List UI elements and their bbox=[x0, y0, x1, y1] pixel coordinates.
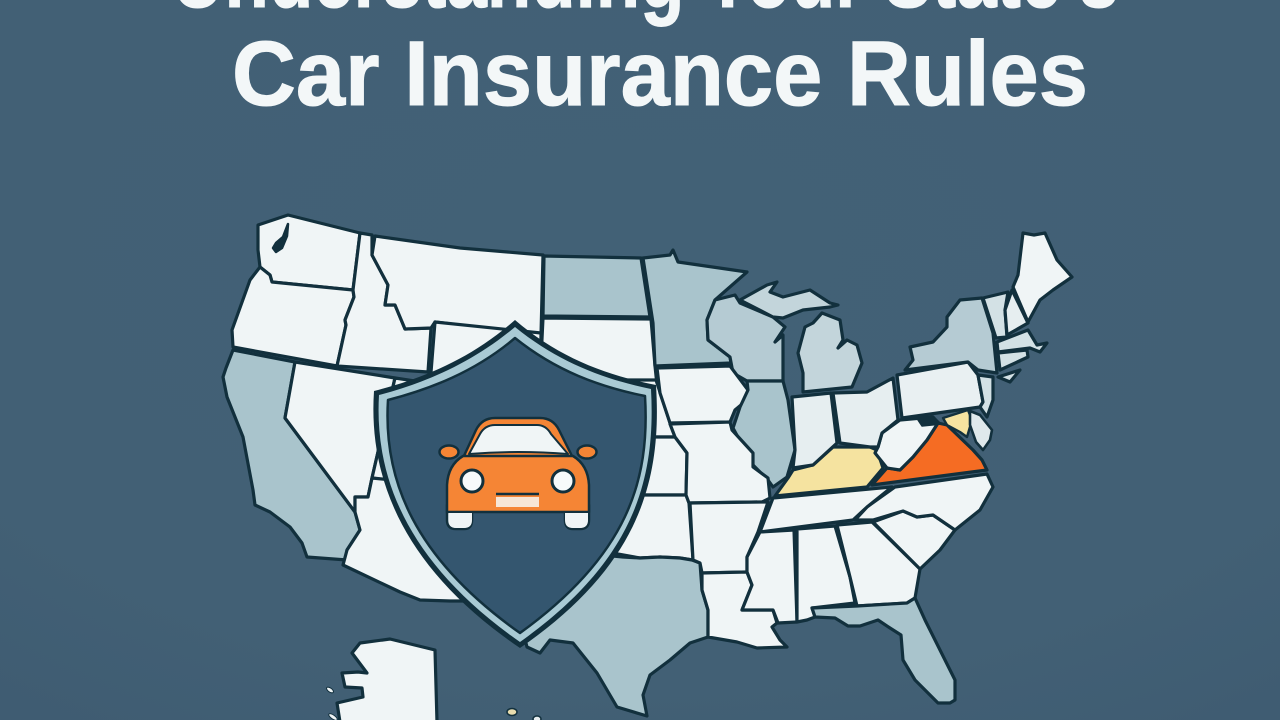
dark Potomac patch bbox=[918, 417, 941, 426]
car body bbox=[447, 456, 589, 512]
state: Wyoming bbox=[428, 322, 541, 420]
state: West Virginia bbox=[875, 417, 938, 470]
state: Idaho bbox=[337, 233, 431, 372]
state: Alabama bbox=[797, 526, 855, 622]
state: Washington bbox=[258, 215, 360, 290]
state: Nebraska bbox=[540, 380, 675, 437]
car windshield bbox=[469, 425, 568, 454]
state: Oregon bbox=[232, 267, 354, 366]
state: Oklahoma bbox=[540, 495, 693, 560]
state: North Carolina bbox=[855, 474, 993, 530]
state: Minnesota bbox=[643, 250, 747, 366]
state: Connecticut and Rhode Island bbox=[998, 350, 1028, 370]
state: Florida bbox=[812, 598, 955, 703]
state: Arkansas bbox=[690, 502, 768, 573]
icon: car bbox=[440, 418, 596, 529]
car plate bbox=[496, 494, 539, 507]
shield bbox=[373, 320, 657, 648]
state: Maryland bbox=[943, 410, 972, 437]
state: Massachusetts bbox=[997, 330, 1047, 352]
state: Montana bbox=[372, 236, 543, 335]
state: Tennessee bbox=[760, 487, 892, 532]
state: Virginia bbox=[872, 423, 987, 485]
state: Georgia bbox=[837, 522, 920, 606]
state: Arizona and New Mexico bbox=[343, 478, 540, 601]
state: Louisiana bbox=[702, 572, 787, 648]
state: Illinois bbox=[733, 381, 795, 487]
state: New York bbox=[905, 298, 997, 373]
state: New Jersey bbox=[978, 375, 993, 417]
state: South Carolina bbox=[873, 511, 955, 569]
state: Kentucky bbox=[775, 447, 883, 496]
Puget Sound inlet bbox=[273, 224, 288, 252]
state: Pennsylvania bbox=[897, 362, 983, 418]
state: Indiana bbox=[792, 393, 837, 468]
car wheel tops bbox=[448, 513, 588, 528]
shield inner panel bbox=[387, 338, 646, 633]
state: Nevada bbox=[285, 362, 395, 512]
state: Vermont bbox=[983, 292, 1008, 338]
state: Delaware and Delmarva bbox=[970, 411, 992, 450]
state: Michigan upper peninsula bbox=[740, 282, 838, 318]
state: Michigan lower peninsula bbox=[798, 313, 862, 392]
map of the United States bbox=[223, 215, 1072, 720]
state: Utah and Colorado bbox=[372, 378, 540, 500]
state: Texas bbox=[500, 545, 708, 716]
islands bbox=[326, 686, 541, 720]
state: Long Island bbox=[998, 370, 1020, 382]
state: Missouri bbox=[670, 422, 770, 510]
state: North Dakota bbox=[543, 256, 650, 317]
car mirrors bbox=[440, 446, 458, 458]
shield light ring bbox=[379, 327, 652, 642]
state: Iowa bbox=[657, 366, 748, 423]
car wheels bbox=[447, 505, 472, 529]
state: Kansas bbox=[540, 437, 687, 495]
state: California bbox=[223, 350, 360, 560]
state: Mississippi bbox=[742, 530, 797, 623]
state: Maine bbox=[1013, 233, 1072, 322]
state: Ohio bbox=[833, 378, 898, 447]
title: Car Insurance Rules bbox=[232, 23, 1088, 125]
shield outer outline bbox=[373, 320, 657, 648]
state: New Hampshire bbox=[1005, 290, 1028, 335]
state: Alaska bbox=[337, 639, 437, 720]
state: Wisconsin bbox=[707, 295, 785, 381]
car roof bbox=[463, 418, 573, 458]
car headlights bbox=[461, 470, 483, 492]
state: South Dakota bbox=[540, 318, 657, 385]
